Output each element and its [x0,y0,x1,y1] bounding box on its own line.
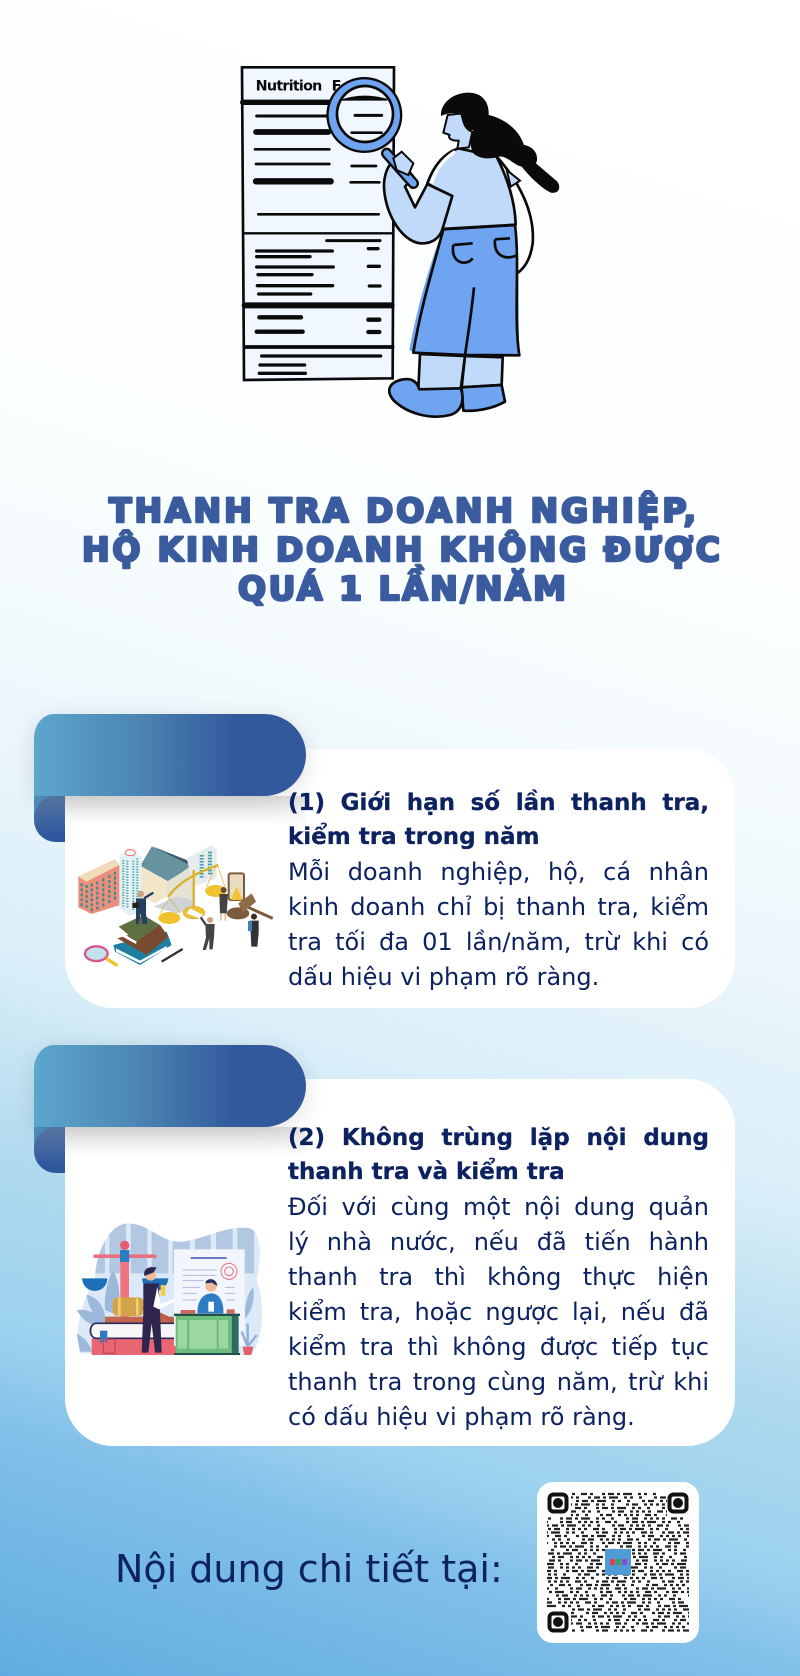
potted plant [242,1323,257,1355]
plants [77,1271,254,1352]
body 1: kinh doanh chỉ bị thanh tra, kiểm [288,893,709,921]
illustration: lawyer and officer at desk [76,1224,262,1355]
body 1 [288,858,709,991]
QR finder top left [550,1494,566,1512]
footer label: Nội dung chi tiết tại: [115,1547,503,1591]
heading 1 [288,789,709,850]
illustration: woman inspecting nutrition facts with magnifier [240,66,560,418]
magnifier [326,77,413,183]
QR finder top right [670,1494,686,1512]
body 1: dấu hiệu vi phạm rõ ràng. [288,963,599,991]
panel: item 2 [28,1042,735,1446]
card 1 banner shadow [65,796,305,826]
body 2 [288,1193,709,1431]
body 1: Mỗi doanh nghiệp, hộ, cá nhân [288,858,709,886]
body 2: có dấu hiệu vi phạm rõ ràng. [288,1403,635,1431]
body 2: kiểm tra thì không được tiếp tục [288,1333,709,1361]
face [443,113,472,149]
shirt and arm [427,148,516,229]
body 2: Đối với cùng một nội dung quản [288,1193,709,1221]
QR finder bottom left [550,1614,566,1630]
hair and braid [441,93,559,193]
pen [162,949,183,962]
heading 1: (1) Giới hạn số lần thanh tra, [288,790,709,816]
card 2 banner shadow [65,1127,305,1157]
skirt [409,225,519,355]
heading 2 [288,1125,709,1185]
gavel [105,1297,175,1324]
white tower [119,850,142,916]
body 2: kiểm tra, hoặc ngược lại, nếu đã [288,1298,709,1326]
pink building [78,859,120,914]
heading 2: (2) Không trùng lặp nội dung [288,1125,709,1151]
magnifying glass [85,946,117,966]
title: THANH TRA DOANH NGHIỆP, [109,490,696,530]
title: HỘ KINH DOANH KHÔNG ĐƯỢC [82,529,720,569]
golden scales [158,865,226,924]
stack of books [113,915,172,965]
nutrition label: Nutrition [256,79,322,95]
heading 1: kiểm tra trong năm [288,824,539,850]
business woman [219,887,228,921]
body 1: tra tối đa 01 lần/năm, trừ khi có [288,928,709,956]
body 2: thanh tra thì không thực hiện [288,1263,709,1291]
heading 2: thanh tra và kiểm tra [288,1159,565,1185]
blob background [78,1224,262,1355]
man with folder [248,914,259,947]
man on books [132,891,153,924]
panel: item 1 [28,712,735,1008]
body 2: thanh tra trong cùng năm, trừ khi [288,1368,709,1396]
title: QUÁ 1 LẦN/NĂM [238,564,566,608]
card 1 background [65,749,735,1008]
legs [418,354,503,389]
nutrition label [242,67,394,380]
QR code panel [537,1482,699,1643]
red book [90,1323,177,1355]
text: item 1 [288,789,709,991]
nutrition label: F [332,79,341,95]
courthouse [142,845,217,913]
title [82,490,720,608]
card 2 background [65,1079,735,1446]
balance scale [82,1241,168,1317]
card 2 ribbon banner [34,1045,306,1127]
lawyer standing [142,1267,176,1353]
body 2: lý nhà nước, nếu đã tiến hành [288,1228,709,1256]
card 2 ribbon curl [34,1127,65,1173]
QR modules [547,1494,689,1630]
card 1 ribbon curl [34,796,65,842]
QR center logo [605,1549,631,1575]
shoes [462,385,505,411]
back arm [498,158,533,274]
hourglass and gavel [227,873,273,919]
document [174,1249,245,1346]
seated officer [197,1279,223,1313]
illustration: law and business buildings [78,845,274,968]
card 1 ribbon banner [34,714,306,796]
text: item 2 [288,1125,709,1431]
desk [174,1309,240,1355]
man reaching [187,908,215,950]
